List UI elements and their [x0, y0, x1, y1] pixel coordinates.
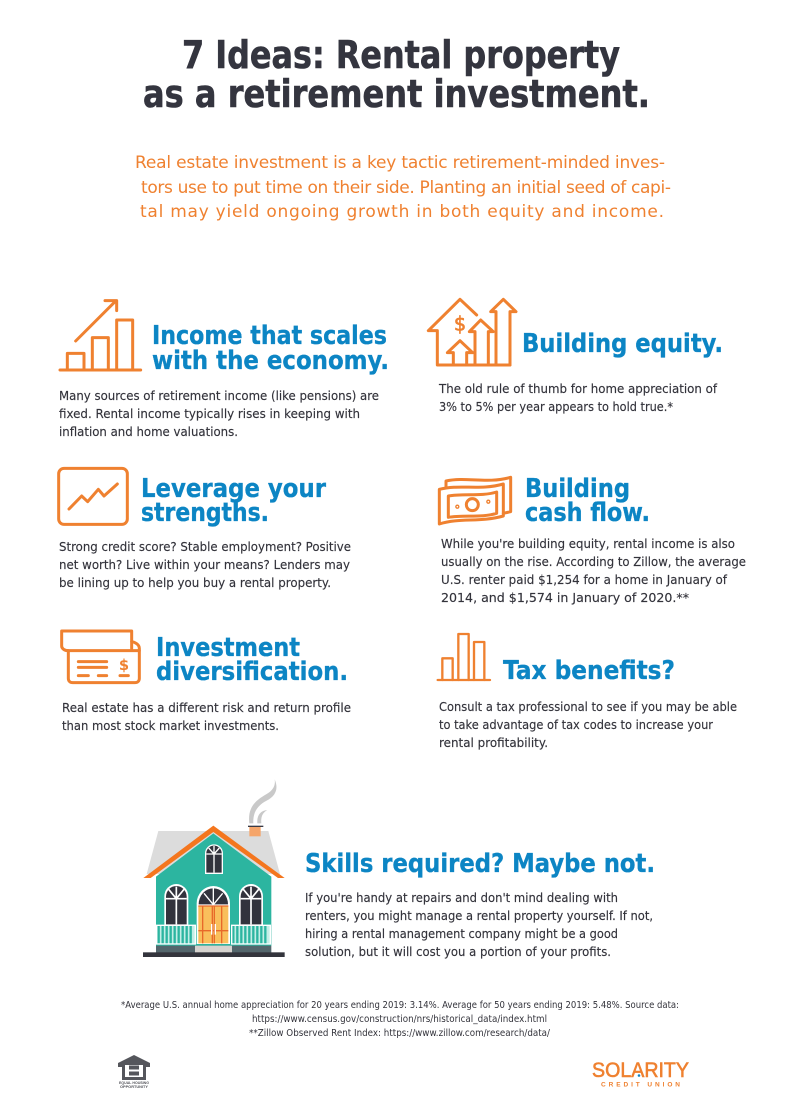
heading: leverage: strengths.: [141, 498, 269, 528]
smoke: [249, 779, 276, 823]
title: as a retirement investment.: [143, 72, 650, 116]
intro text: tal may yield ongoing growth in both equity and income.: [140, 202, 664, 222]
icon: cheque: $: [119, 657, 129, 674]
panel: leverage your strengths: [59, 468, 351, 590]
body: skills: hiring a rental management company might be a good: [305, 926, 618, 941]
footnotes: [121, 1000, 679, 1039]
title: 7 Ideas: Rental property: [182, 33, 620, 77]
heading: cash flow: [525, 474, 650, 528]
icon: bar chart: [438, 634, 490, 680]
grey roof: [147, 831, 280, 874]
icon: banknotes: [439, 477, 511, 524]
icon: rising bar chart with arrow: [60, 301, 141, 370]
body: cash flow: [441, 536, 746, 605]
body: leverage: be lining up to help you buy a rental property.: [59, 575, 331, 590]
body: skills: [305, 890, 653, 959]
body: leverage: Strong credit score? Stable employment? Positive: [59, 539, 351, 554]
body: cash flow: usually on the rise. According to Zillow, the average: [441, 554, 746, 569]
intro text: tors use to put time on their side. Planting an initial seed of capi-: [141, 178, 671, 198]
left window: [164, 884, 188, 926]
body: building equity: The old rule of thumb for home appreciation of: [438, 381, 718, 396]
intro text: [135, 153, 671, 222]
intro text: Real estate investment is a key tactic retirement-minded inves-: [135, 153, 665, 173]
logo: equal housing opportunity: OPPORTUNITY: [120, 1084, 148, 1089]
body: building equity: 3% to 5% per year appears to hold true.*: [439, 399, 673, 414]
body: income: [59, 388, 379, 439]
body: investment: Real estate has a different risk and return profile: [62, 700, 351, 715]
footnotes: https://www.census.gov/construction/nrs/historical_data/index.html: [252, 1014, 547, 1025]
heading: cash flow: cash flow.: [525, 498, 650, 528]
body: cash flow: While you're building equity, rental income is also: [441, 536, 735, 551]
body: leverage: [59, 539, 351, 590]
plinth: [156, 946, 271, 953]
icon: house with rising arrows: [428, 299, 516, 365]
body: tax benefits: Consult a tax professional to see if you may be able: [439, 699, 737, 714]
heading: cash flow: Building: [525, 474, 630, 504]
heading: investment: diversification.: [156, 657, 348, 687]
logo: equal housing opportunity: [118, 1055, 150, 1089]
body: cash flow: 2014, and $1,574 in January of 2020.**: [441, 590, 689, 605]
panel: skills required: [143, 779, 655, 959]
body: skills: solution, but it will cost you a portion of your profits.: [305, 944, 611, 959]
heading: income: with the economy.: [152, 346, 389, 376]
illustration: teal house: [143, 779, 285, 957]
footnotes: *Average U.S. annual home appreciation for 20 years ending 2019: 3.14%. Average for 50 years ending 2019: 5.48%. Source data:: [121, 1000, 679, 1011]
orange roof edge: [143, 826, 285, 878]
house body: [156, 833, 271, 946]
body: tax benefits: rental profitability.: [439, 735, 548, 750]
body: income: Many sources of retirement income (like pensions) are: [59, 388, 379, 403]
heading: leverage: [141, 474, 326, 528]
body: investment: [62, 700, 351, 733]
chimney: [249, 827, 261, 836]
right railing: [231, 925, 271, 944]
body: skills: renters, you might manage a rental property yourself. If not,: [305, 908, 653, 923]
body: building equity: [438, 381, 718, 414]
body: income: inflation and home valuations.: [59, 424, 238, 439]
icon: line chart in rounded frame: [59, 468, 127, 524]
footnotes: **Zillow Observed Rent Index: https://www.zillow.com/research/data/: [249, 1028, 551, 1039]
door arch: [197, 886, 230, 944]
icon: cheque: [62, 631, 139, 683]
heading: tax benefits: Tax benefits?: [503, 656, 675, 686]
heading: investment: Investment: [156, 633, 300, 663]
left railing: [156, 925, 196, 944]
logo: solarity credit union: CREDIT UNION: [601, 1082, 680, 1088]
upper window: [205, 844, 223, 874]
logo: equal housing opportunity: EQUAL HOUSING: [119, 1080, 149, 1085]
icon: house with rising arrows: $: [454, 313, 466, 336]
heading: income: Income that scales: [152, 321, 387, 351]
panel: building equity: [428, 299, 723, 414]
body: investment: than most stock market investments.: [62, 718, 279, 733]
logo: solarity credit union: SOLARITY: [592, 1059, 689, 1082]
right window: [239, 884, 263, 926]
body: income: fixed. Rental income typically rises in keeping with: [59, 406, 360, 421]
title: [143, 33, 650, 116]
body: cash flow: U.S. renter paid $1,254 for a home in January of: [441, 572, 728, 587]
panel: investment diversification: [62, 631, 351, 733]
panel: tax benefits: [438, 634, 737, 750]
heading: leverage: Leverage your: [141, 474, 326, 504]
heading: building equity: Building equity.: [522, 329, 723, 359]
body: skills: If you're handy at repairs and don't mind dealing with: [305, 890, 618, 905]
panel: building cash flow: [439, 474, 746, 605]
heading: investment: [156, 633, 348, 687]
body: tax benefits: to take advantage of tax codes to increase your: [439, 717, 714, 732]
heading: income: [152, 321, 389, 376]
panel: income that scales: [59, 301, 389, 439]
body: tax benefits: [439, 699, 737, 750]
heading: skills: Skills required? Maybe not.: [305, 849, 655, 879]
body: leverage: net worth? Live within your means? Lenders may: [59, 557, 351, 572]
